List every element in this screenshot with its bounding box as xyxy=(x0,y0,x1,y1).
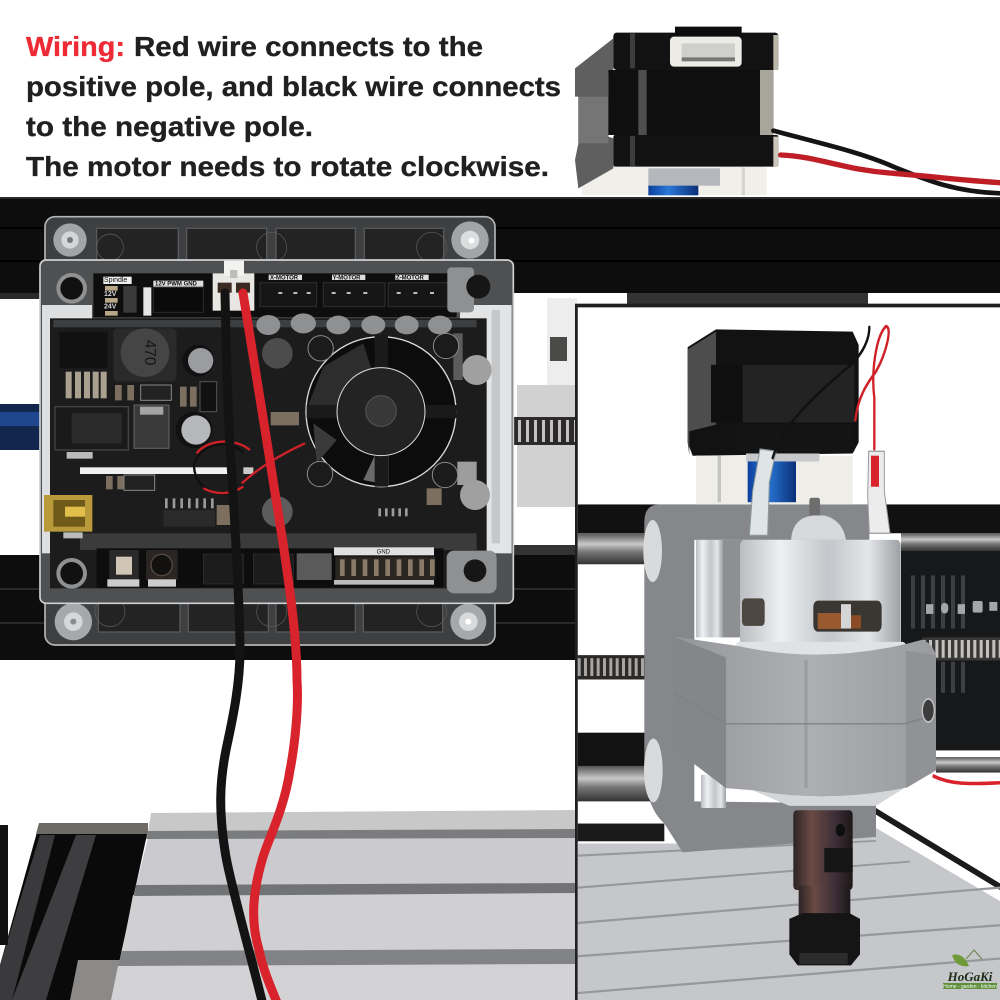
spindle motor xyxy=(736,498,906,655)
logo xyxy=(943,950,997,990)
motor mount pillars xyxy=(582,167,767,195)
usb port xyxy=(44,495,92,538)
top connectors: Spindle xyxy=(104,277,127,284)
top connectors: 12V PWM GND xyxy=(155,281,198,287)
line 1: Red wire connects to the xyxy=(134,31,483,62)
line 3: to the negative pole. xyxy=(26,111,313,142)
top connectors: Z-MOTOR xyxy=(396,275,424,281)
buttons and bottom headers: GND xyxy=(377,549,391,555)
power and passive components xyxy=(55,328,492,527)
motor housing block xyxy=(673,637,936,796)
clear front cover xyxy=(40,260,513,603)
machine frame rails xyxy=(0,197,1000,660)
inset frame xyxy=(575,304,1000,1000)
line 1: Wiring: xyxy=(26,31,125,62)
inset stepper motor xyxy=(688,329,859,456)
table top: left xyxy=(0,810,578,1000)
inset background xyxy=(578,307,1000,1000)
buttons and bottom headers xyxy=(107,547,435,587)
line 4: The motor needs to rotate clockwise. xyxy=(26,151,549,182)
line 2: positive pole, and black wire connects xyxy=(26,71,561,102)
spindle power connector xyxy=(213,261,254,311)
top connectors xyxy=(103,275,450,316)
top connectors: 12V xyxy=(104,291,117,298)
fan xyxy=(306,335,457,487)
top connectors: 24V xyxy=(104,304,117,311)
back plate xyxy=(45,217,495,645)
clear cover bumps xyxy=(256,313,452,335)
spade terminals xyxy=(749,449,890,535)
motor connector xyxy=(670,27,742,67)
power and passive components: 470 xyxy=(141,340,158,365)
red and black cables to connector xyxy=(221,293,297,1000)
collet chuck xyxy=(753,788,904,965)
motor body xyxy=(575,33,778,188)
logo: HoGaKi xyxy=(947,969,993,984)
controller board xyxy=(40,217,513,645)
fan screws xyxy=(307,333,459,488)
logo: Home - garden - kitchen xyxy=(943,984,997,990)
fan wires xyxy=(194,442,305,494)
gray carriage xyxy=(643,504,876,852)
top connectors: X-MOTOR xyxy=(270,275,299,281)
headline: wiring instructions xyxy=(26,31,561,182)
stepper motor: top xyxy=(575,27,1000,195)
inset rails and rods xyxy=(578,504,1000,841)
top connectors: Y-MOTOR xyxy=(333,275,361,281)
main circuit board xyxy=(50,273,487,588)
inset motor pillars xyxy=(696,453,853,504)
inset photo: spindle motor xyxy=(575,304,1000,1000)
black cover screws xyxy=(56,267,497,593)
corner screws xyxy=(53,221,489,640)
motor wires xyxy=(773,131,1000,193)
spindle wires xyxy=(773,326,889,458)
inset table xyxy=(578,808,1000,1000)
